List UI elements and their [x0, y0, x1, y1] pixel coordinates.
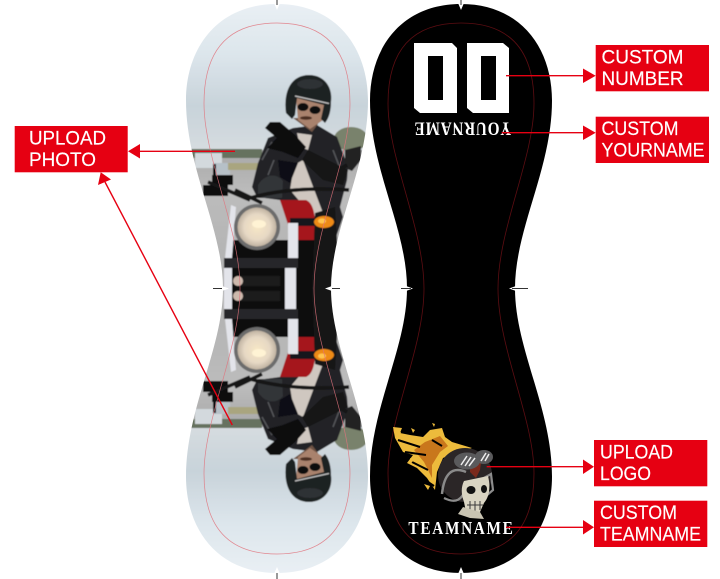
panel: photo side — [180, 0, 370, 577]
arrow: upload logo — [487, 460, 594, 474]
label: upload photo: PHOTO — [29, 150, 96, 171]
arrow: custom teamname — [506, 520, 594, 534]
arrow: custom number — [506, 68, 596, 83]
label: upload logo — [594, 440, 707, 486]
label: upload logo: UPLOAD — [600, 442, 673, 463]
arrow: custom yourname — [502, 126, 596, 140]
label: custom number: NUMBER — [602, 69, 684, 90]
photo: mirrored motorcycle rider — [180, 0, 370, 577]
number 00 — [414, 43, 509, 113]
text: teamname: TEAMNAME — [408, 518, 515, 538]
label: custom teamname — [594, 501, 707, 547]
label: custom yourname: YOURNAME — [602, 141, 704, 162]
registration marks — [213, 0, 528, 579]
logo: flaming skull — [393, 423, 493, 519]
cut line — [204, 23, 350, 554]
label: upload photo — [15, 126, 128, 172]
label: custom number — [596, 45, 709, 91]
label: custom yourname: CUSTOM — [602, 119, 678, 140]
panel: black side — [370, 4, 552, 573]
inner cut line — [388, 23, 534, 554]
label: upload logo: LOGO — [600, 464, 651, 485]
label: custom yourname — [596, 117, 709, 163]
label: custom teamname: TEAMNAME — [600, 525, 701, 546]
text: yourname: YOURNAME — [414, 118, 511, 139]
arrow: photo horizontal — [128, 144, 235, 158]
label: custom teamname: CUSTOM — [600, 503, 677, 524]
label: custom number: CUSTOM — [602, 47, 684, 68]
arrow: photo diagonal — [98, 172, 232, 425]
label: upload photo: UPLOAD — [29, 128, 106, 149]
black shape — [370, 4, 552, 573]
